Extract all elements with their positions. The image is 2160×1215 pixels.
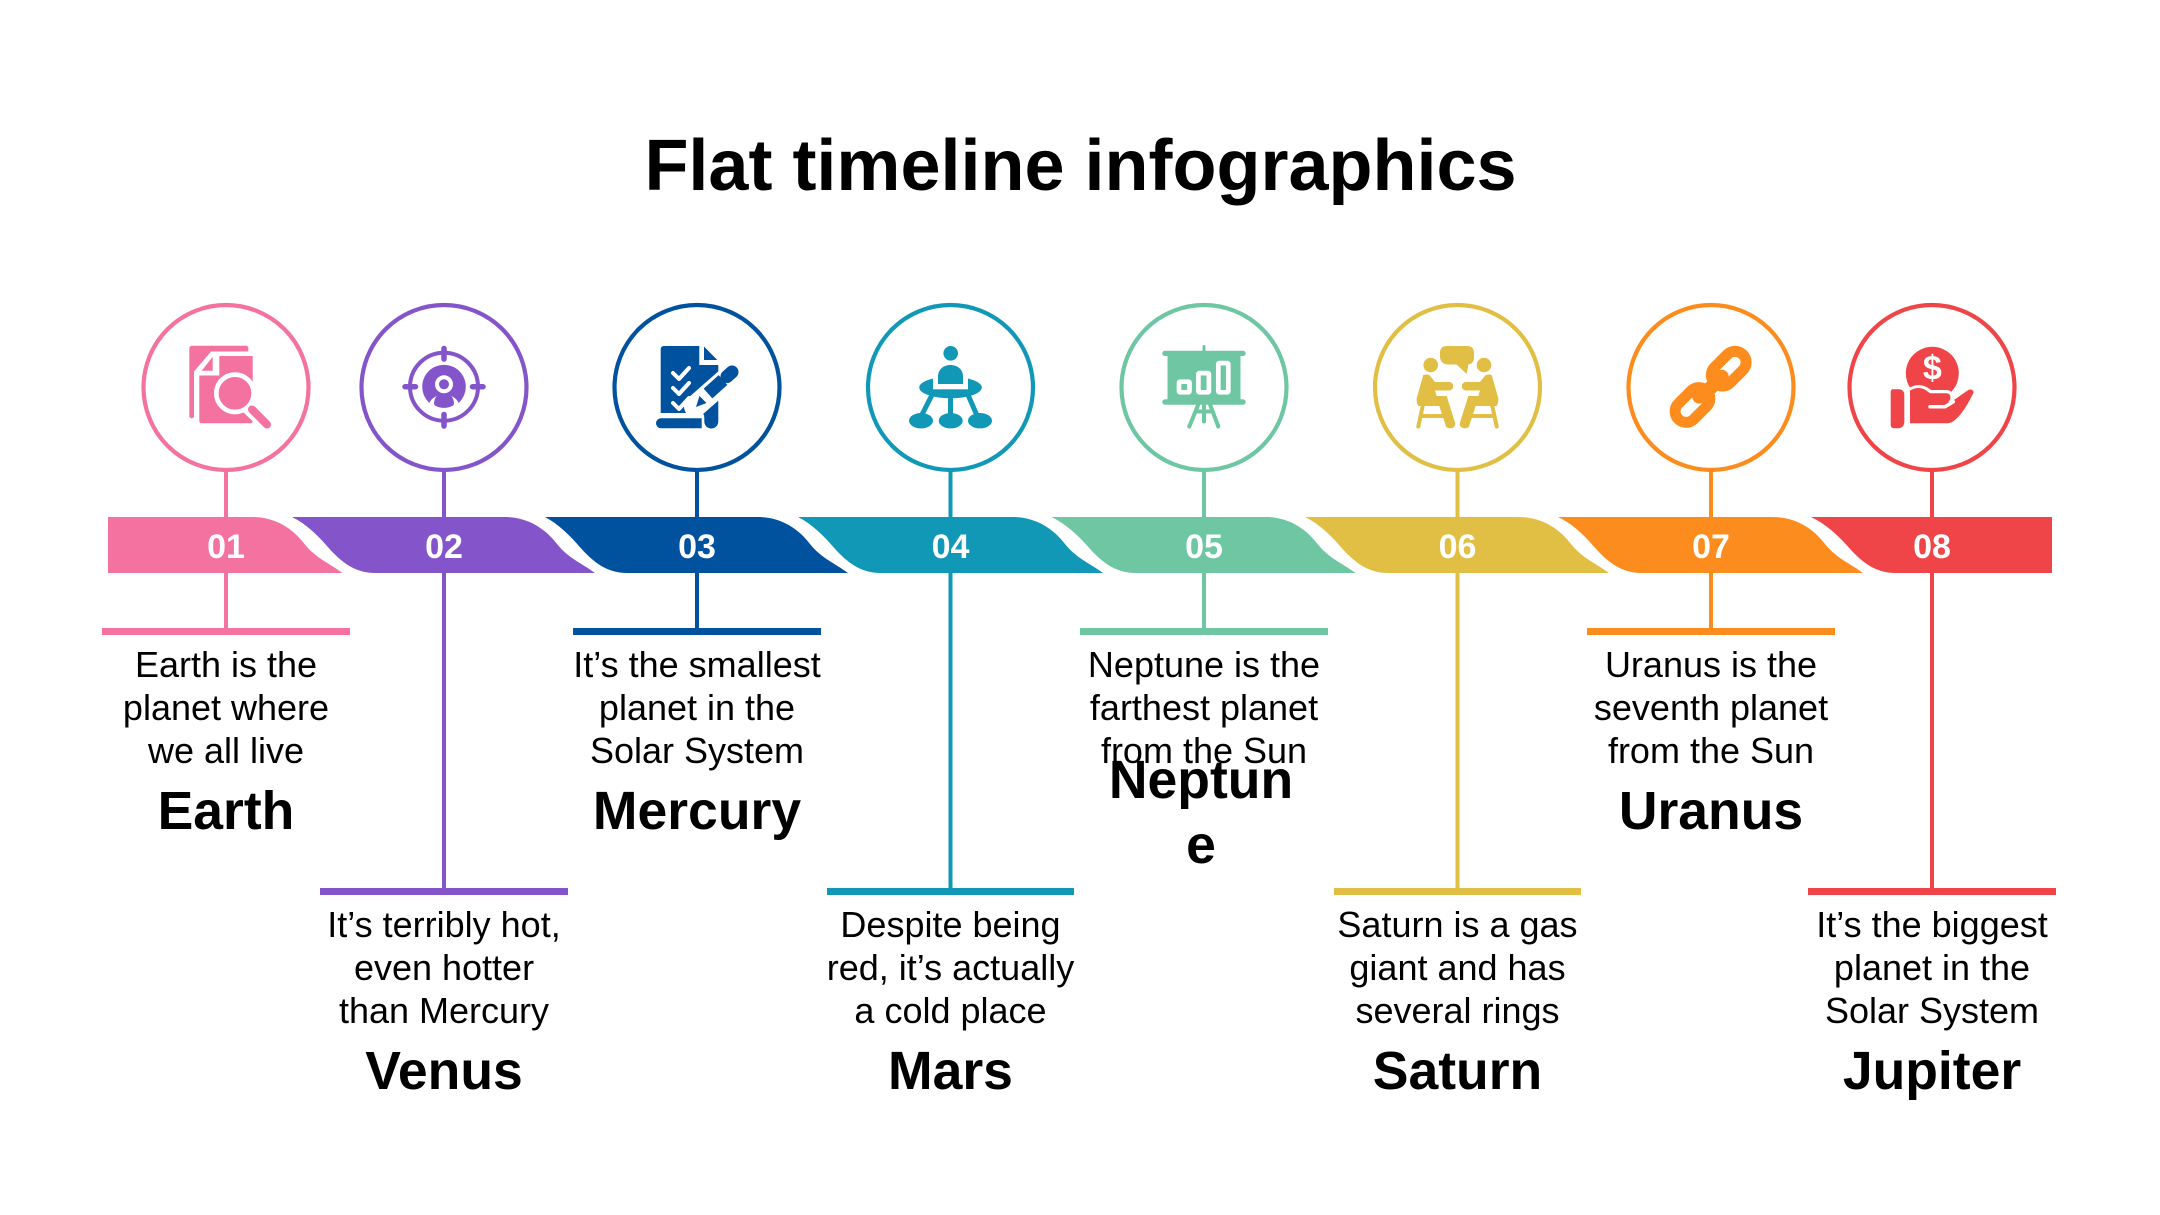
stem — [1456, 470, 1460, 890]
name: Neptun — [1109, 751, 1293, 810]
description: Solar System — [1825, 990, 2039, 1031]
circle — [868, 305, 1033, 470]
name: Venus — [365, 1042, 523, 1101]
icon: hand holding coin — [1891, 347, 1975, 428]
description: we all live — [147, 730, 304, 771]
step 04: Mars — [798, 305, 1103, 1101]
circle — [1375, 305, 1540, 470]
stem — [948, 470, 952, 890]
band segment 06 — [1305, 517, 1609, 573]
circle — [1628, 305, 1794, 470]
band segment 01 — [108, 517, 342, 573]
icon: two people talking — [1417, 346, 1498, 428]
step 01: Earth — [102, 305, 350, 841]
description: Neptune is the — [1088, 644, 1320, 685]
bar — [1334, 888, 1581, 895]
name: Jupiter — [1843, 1042, 2021, 1101]
description: from the Sun — [1608, 730, 1814, 771]
icon: checklist and pencil — [656, 346, 736, 428]
description: than Mercury — [339, 990, 549, 1031]
circle — [1122, 305, 1286, 470]
circle — [144, 305, 308, 470]
band segment 08 — [1811, 517, 2052, 573]
number: 08 — [1913, 528, 1951, 566]
description: giant and has — [1349, 947, 1566, 988]
icon: target person — [405, 348, 483, 426]
name: Uranus — [1619, 782, 1803, 841]
icon: presentation board — [1162, 345, 1246, 426]
step 03: Mercury — [545, 305, 848, 841]
stem — [442, 470, 446, 890]
circle — [1850, 305, 2014, 470]
band segment 04 — [798, 517, 1103, 573]
name: Mars — [888, 1042, 1013, 1101]
description: planet where — [123, 687, 329, 728]
icon: chain link — [1671, 347, 1751, 427]
number: 04 — [932, 528, 969, 566]
bar — [1587, 628, 1835, 635]
bar — [827, 888, 1074, 895]
description: Saturn is a gas — [1337, 904, 1578, 945]
name: Mercury — [593, 782, 801, 841]
stem — [1930, 470, 1934, 890]
description: farthest planet — [1090, 687, 1318, 728]
bar — [320, 888, 568, 895]
description: Earth is the — [135, 644, 317, 685]
description: It’s terribly hot, — [327, 904, 561, 945]
number: 06 — [1439, 528, 1476, 566]
name: e — [1186, 816, 1216, 875]
description: It’s the smallest — [573, 644, 821, 685]
circle — [362, 305, 526, 470]
icon: meeting table network — [909, 346, 992, 428]
description: seventh planet — [1594, 687, 1828, 728]
stem — [224, 470, 228, 630]
bar — [102, 628, 350, 635]
description: Despite being — [840, 904, 1061, 945]
description: several rings — [1355, 990, 1560, 1031]
icon: hand holding coin: $ — [1923, 350, 1942, 388]
title: Flat timeline infographics — [644, 126, 1517, 206]
description: It’s the biggest — [1816, 904, 2048, 945]
circle — [614, 305, 780, 470]
band segment 02 — [292, 517, 595, 573]
number: 01 — [207, 528, 245, 566]
description: Uranus is the — [1605, 644, 1817, 685]
step 06: Saturn — [1305, 305, 1609, 1101]
name: Saturn — [1373, 1042, 1542, 1101]
number: 07 — [1692, 528, 1730, 566]
description: a cold place — [854, 990, 1047, 1031]
step 07: Uranus — [1558, 305, 1863, 841]
description: planet in the — [599, 687, 795, 728]
description: red, it’s actually — [827, 947, 1074, 988]
description: planet in the — [1834, 947, 2030, 988]
description: Solar System — [590, 730, 804, 771]
description: even hotter — [354, 947, 534, 988]
step 05: Neptune — [1052, 305, 1356, 875]
stem — [1709, 470, 1713, 630]
step 02: Venus — [292, 305, 595, 1101]
band segment 05 — [1052, 517, 1356, 573]
band segment 07 — [1558, 517, 1863, 573]
description: from the Sun — [1101, 730, 1307, 771]
bar — [1808, 888, 2056, 895]
number: 02 — [425, 528, 463, 566]
stem — [1202, 470, 1206, 630]
bar — [573, 628, 821, 635]
name: Earth — [158, 782, 294, 841]
number: 05 — [1185, 528, 1223, 566]
stem — [695, 470, 699, 630]
band segment 03 — [545, 517, 848, 573]
number: 03 — [678, 528, 716, 566]
icon: document search — [189, 346, 270, 428]
bar — [1080, 628, 1328, 635]
step 08: Jupiter — [1808, 305, 2056, 1101]
